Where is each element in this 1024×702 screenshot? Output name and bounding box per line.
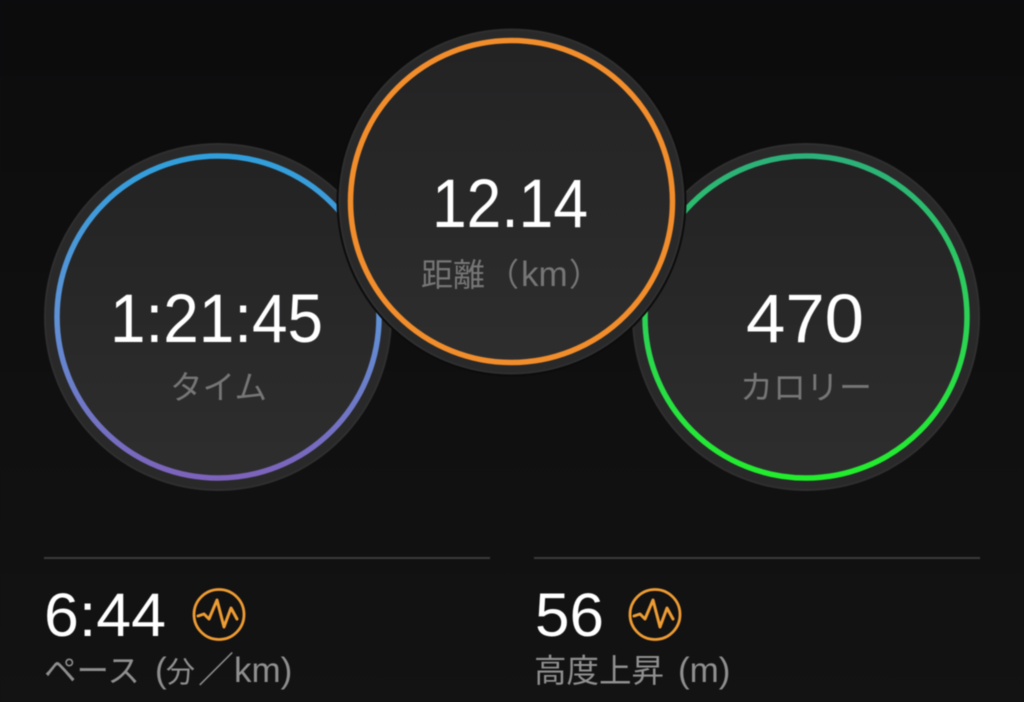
calories label: カロリー [740, 369, 872, 406]
distance label: 距離 [421, 257, 485, 293]
distance label: ） [569, 257, 601, 293]
pace label: 分 [166, 657, 195, 689]
panel: distance circle [336, 26, 686, 376]
divider: elevation [534, 557, 980, 559]
time value: 1:21:45 [110, 280, 323, 357]
icon: elevation activity pulse [630, 590, 680, 640]
panel: calories circle [632, 143, 980, 491]
distance label: km [521, 255, 568, 294]
pace label: ／ [198, 649, 234, 690]
pace value: 6:44 [44, 581, 166, 649]
distance label: （ [487, 257, 519, 293]
calories value: 470 [746, 280, 864, 357]
pace label: ( [155, 651, 167, 690]
distance value: 12.14 [432, 165, 588, 242]
stat: elevation gain [534, 581, 730, 690]
divider: pace [44, 557, 490, 559]
pace label: km) [234, 651, 292, 690]
icon: pace activity pulse [194, 590, 244, 640]
elevation value: 56 [535, 581, 604, 649]
time label: タイム [170, 369, 267, 406]
elevation label: (m) [678, 651, 730, 690]
panel: time circle [44, 143, 392, 491]
elevation label: 高度上昇 [534, 653, 664, 689]
pace label: ペース [44, 653, 140, 689]
stat: pace [44, 581, 292, 690]
